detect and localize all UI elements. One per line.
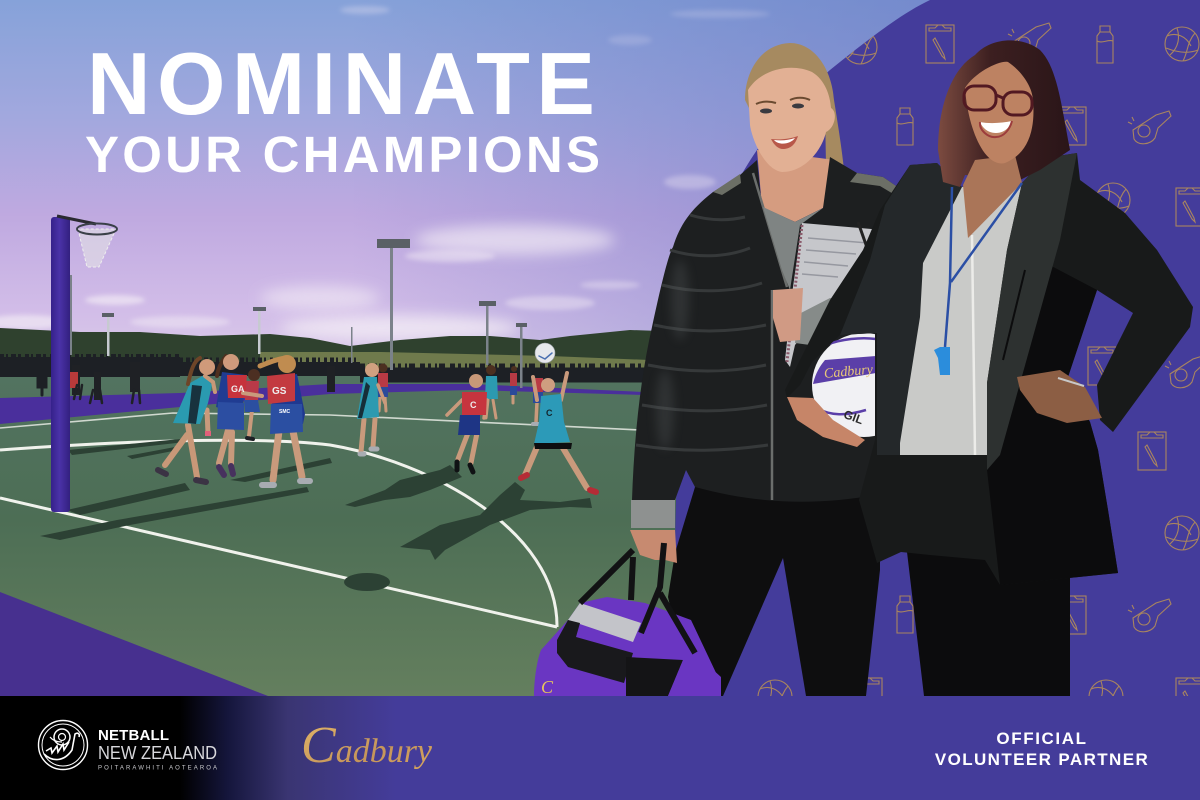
netball in air [535, 343, 555, 363]
player: teal jumping: C [546, 408, 553, 418]
gym bag: C [541, 677, 554, 697]
hand [630, 530, 677, 563]
hand on hip [1017, 370, 1102, 423]
netball players [158, 343, 596, 492]
tree line [0, 328, 720, 372]
sweater [763, 207, 823, 290]
logo: Netball New Zealand: POITARAWHITI AOTEAROA [98, 766, 217, 772]
court surface [0, 376, 720, 696]
sky background [0, 0, 940, 390]
person: right woman with lanyard and netball [785, 40, 1193, 696]
logo: Netball New Zealand [38, 720, 217, 772]
jacket front strip [987, 153, 1077, 470]
jacket shadow centre [987, 260, 1118, 585]
player: red GA: GA [231, 384, 245, 394]
title [85, 34, 600, 183]
lanyard [945, 183, 1022, 347]
player: teal jumping [521, 373, 596, 492]
jacket [785, 153, 1193, 585]
player: red C [447, 374, 487, 472]
purple court band [0, 384, 643, 424]
fleece [900, 183, 1022, 455]
player: red GS: GS [272, 386, 287, 397]
jacket [632, 157, 905, 502]
goal post [51, 216, 117, 512]
subtitle: YOUR CHAMPIONS [85, 126, 600, 183]
grass bank [260, 352, 650, 374]
player: red GS [260, 355, 310, 485]
player: background teal [485, 365, 498, 418]
player: red C: C [470, 400, 477, 410]
jacket sheen [656, 260, 689, 450]
legs [668, 487, 880, 696]
neck [757, 150, 835, 222]
notebook [785, 223, 883, 367]
glasses [964, 86, 1032, 115]
goal net [77, 224, 117, 267]
sweater sleeve [795, 298, 848, 345]
floodlight poles [70, 239, 527, 388]
face [965, 62, 1033, 163]
person: left woman with hair and puffer jacket [630, 43, 905, 696]
netball: Cadbury [823, 363, 874, 382]
player: behind-left legs [205, 410, 211, 436]
hair [745, 43, 844, 170]
official volunteer partner text: VOLUNTEER PARTNER [935, 750, 1149, 769]
netball: GIL [842, 407, 865, 427]
purple corner: bottom left [0, 592, 268, 696]
face [748, 68, 835, 172]
player: teal mid [357, 363, 385, 454]
player shadows [40, 439, 592, 591]
player: teal left [158, 358, 215, 482]
logo: Netball New Zealand: NEW ZEALAND [98, 743, 217, 763]
player: behind jumper [533, 378, 543, 424]
puffer jacket quilting [636, 215, 768, 450]
purple curved panel [675, 0, 1200, 696]
neck and chest [963, 155, 1022, 238]
sleeve cuff [631, 500, 675, 528]
hair [938, 40, 1070, 187]
court lines [0, 413, 640, 627]
player: red GA [216, 354, 262, 475]
player: background red [378, 364, 388, 411]
player: far red [510, 366, 517, 403]
title: NOMINATE [87, 34, 595, 133]
whistle tag [934, 347, 950, 375]
official volunteer partner text: OFFICIAL [996, 729, 1088, 748]
clouds [0, 6, 770, 341]
player: red GS: SMC [279, 409, 290, 415]
logo: Cadbury script: Cadbury [301, 717, 433, 774]
background players [38, 362, 335, 403]
netball [812, 333, 916, 437]
hand under ball [787, 397, 865, 447]
bracelet [1058, 378, 1084, 386]
hand on zip [773, 288, 803, 342]
pattern icons: gold line icons [721, 23, 1200, 716]
pants [895, 455, 1070, 696]
player: background red blue [244, 369, 260, 439]
official volunteer partner text [935, 729, 1149, 769]
logo: Netball New Zealand: NETBALL [98, 727, 169, 744]
crowd [0, 357, 650, 375]
koru emblem [38, 720, 88, 770]
footer bar [0, 696, 1200, 800]
gym bag [534, 543, 721, 697]
